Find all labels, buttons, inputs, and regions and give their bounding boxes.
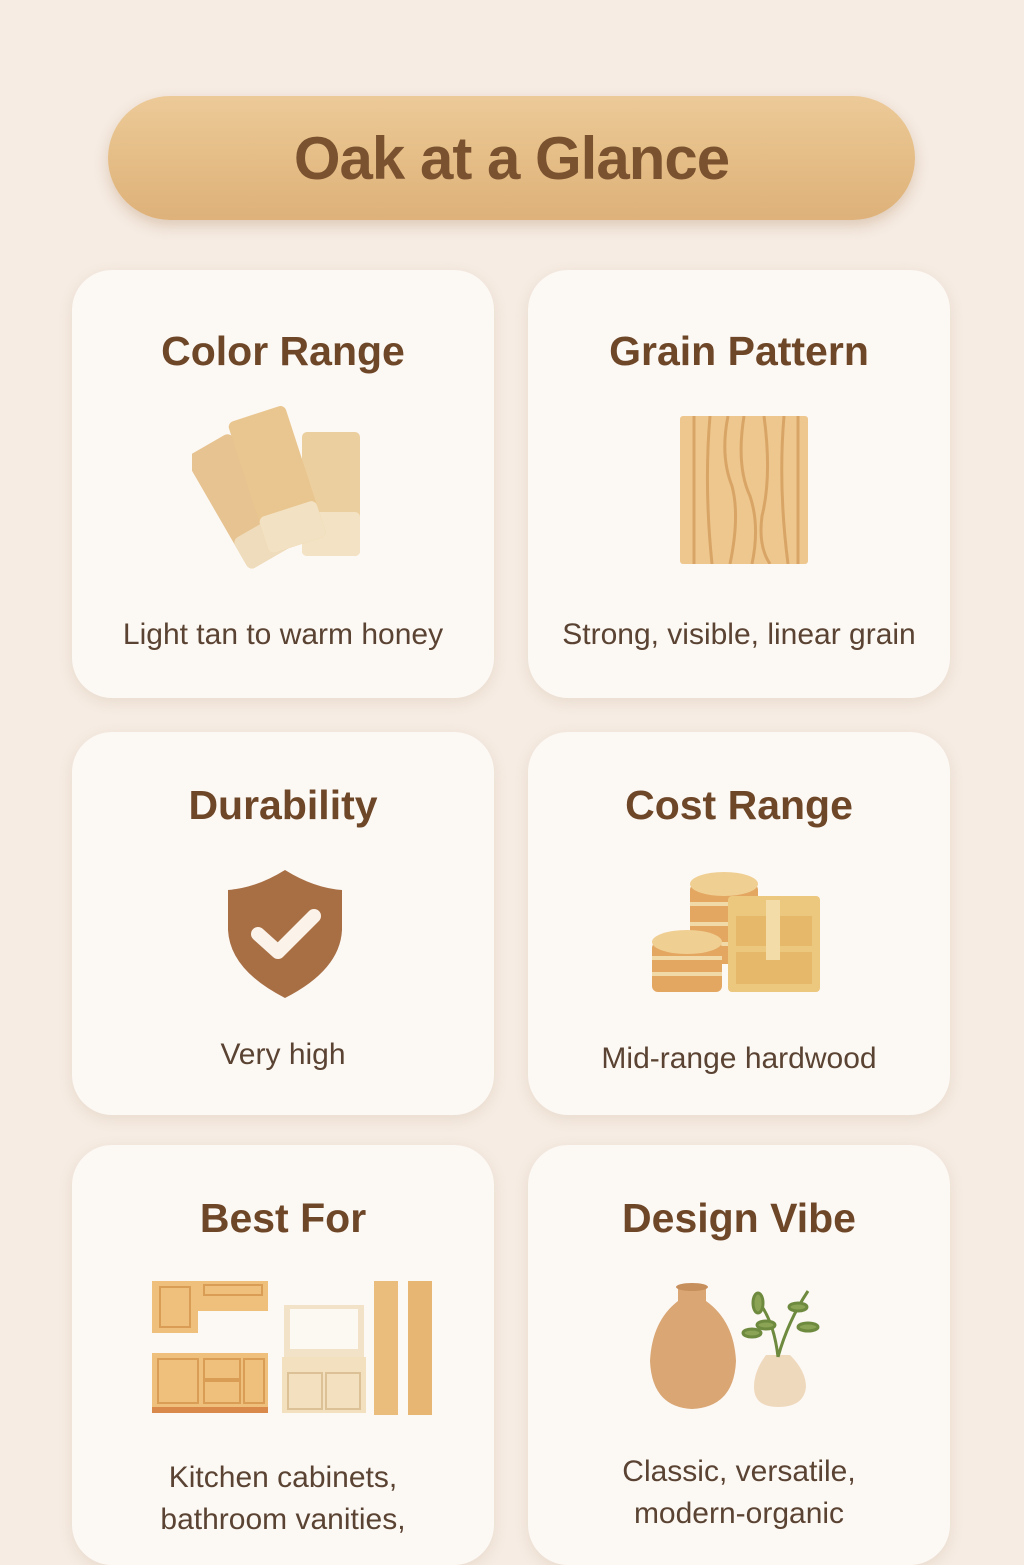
icon: wood swatches	[192, 406, 360, 568]
description: Very high	[220, 1038, 346, 1071]
panel: grain pattern	[528, 270, 950, 698]
heading: design vibe: Design Vibe	[622, 1195, 856, 1241]
icon: cabinets and planks	[152, 1281, 432, 1415]
panel: durability	[72, 732, 494, 1115]
description: Kitchen cabinets,	[169, 1461, 397, 1494]
panel: color range	[72, 270, 494, 698]
icon: grain block	[680, 416, 808, 564]
description: bathroom vanities,	[160, 1503, 406, 1536]
panel: cost range	[528, 732, 950, 1115]
description	[622, 1455, 856, 1530]
icon: coins and chest	[652, 872, 820, 992]
heading: grain pattern: Grain Pattern	[609, 328, 869, 374]
title banner: Oak at a Glance	[294, 124, 729, 192]
description: Classic, versatile,	[622, 1455, 856, 1488]
panel: best for	[72, 1145, 494, 1565]
description: Strong, visible, linear grain	[562, 618, 916, 651]
heading: color range: Color Range	[161, 328, 405, 374]
description: Light tan to warm honey	[123, 618, 443, 651]
icon: vase and plant	[650, 1283, 820, 1409]
heading: best for: Best For	[200, 1195, 366, 1241]
heading: cost range: Cost Range	[625, 782, 853, 828]
description: modern-organic	[634, 1497, 844, 1530]
panel: design vibe	[528, 1145, 950, 1565]
icon: shield check	[228, 870, 342, 998]
title banner	[108, 96, 915, 220]
description: Mid-range hardwood	[601, 1042, 877, 1075]
heading: durability: Durability	[188, 782, 378, 828]
description	[160, 1461, 406, 1536]
